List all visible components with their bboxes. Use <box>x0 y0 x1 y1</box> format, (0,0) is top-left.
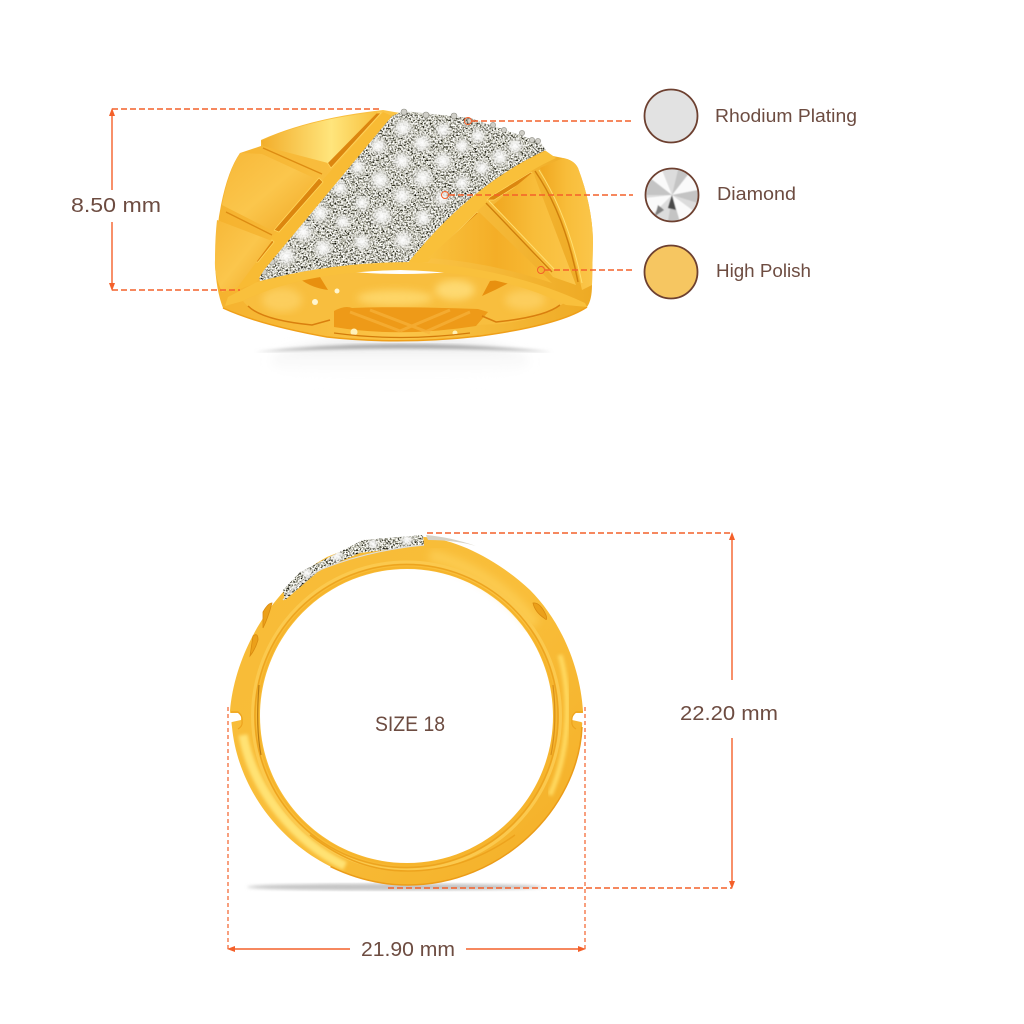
highlight on lower band <box>243 735 345 866</box>
label: rhodium: Rhodium Plating <box>715 106 857 126</box>
front rim <box>225 262 587 307</box>
interior dark wedges <box>300 277 516 296</box>
highlight on right band <box>550 655 567 795</box>
callout: diamond leader <box>442 192 633 198</box>
interior engraved centre <box>334 307 488 332</box>
top left panel <box>261 112 378 163</box>
right grooves <box>434 172 534 257</box>
dimension: width 21.90 mm: 21.90 mm <box>361 939 455 961</box>
size label: SIZE 18 <box>375 713 445 736</box>
white sliver through ring <box>353 270 452 274</box>
lower left panel <box>215 220 272 292</box>
callout: rhodium plating leader <box>464 118 633 124</box>
left groove <box>254 113 381 262</box>
pave diamond field <box>259 112 546 281</box>
right panel seam lines <box>486 171 578 282</box>
swatch: diamond <box>645 168 698 222</box>
side oval grooves <box>250 603 547 656</box>
panel: front view ring <box>229 530 585 890</box>
dimension: outer height 22.20 mm: 22.20 mm <box>680 703 778 725</box>
diamonds <box>273 116 525 269</box>
ring outer silhouette <box>215 110 593 341</box>
label: high polish: High Polish <box>716 261 811 281</box>
dimension: height 8.50 mm: 8.50 mm <box>71 195 161 217</box>
swatch: rhodium <box>644 90 698 142</box>
dimension: outer height 22.20 mm <box>388 532 778 889</box>
interior soft highlights <box>262 280 545 312</box>
legend: high polish <box>644 246 811 298</box>
right diagonal gold band <box>407 151 556 264</box>
dimension: height 8.50 mm <box>71 108 382 291</box>
opening interior <box>243 270 564 338</box>
lower lip shading <box>223 307 587 341</box>
pave bead top edge <box>261 109 541 275</box>
legend: diamond <box>645 168 796 222</box>
dimension: width 21.90 mm <box>227 707 586 961</box>
swatch: high polish <box>644 246 698 298</box>
upper triangle panel <box>493 172 576 285</box>
front view pave <box>282 535 475 600</box>
left panel seam lines <box>226 148 322 235</box>
highlight on upper band <box>430 555 535 625</box>
lower triangle panel <box>428 212 552 283</box>
front ring shadow <box>247 884 543 890</box>
outer edge shading <box>330 727 582 885</box>
ring body <box>230 537 583 885</box>
band side notches <box>229 712 585 729</box>
callout: high polish leader <box>538 266 633 274</box>
legend: rhodium plating <box>644 90 857 142</box>
middle left panel <box>222 153 314 231</box>
panel: top view ring <box>214 108 593 356</box>
inner rim <box>252 562 560 870</box>
label: diamond: Diamond <box>717 184 796 204</box>
left diagonal gold band <box>232 112 392 292</box>
ring shadow <box>255 338 552 386</box>
lower crease <box>310 835 515 871</box>
far right panel <box>540 158 593 290</box>
